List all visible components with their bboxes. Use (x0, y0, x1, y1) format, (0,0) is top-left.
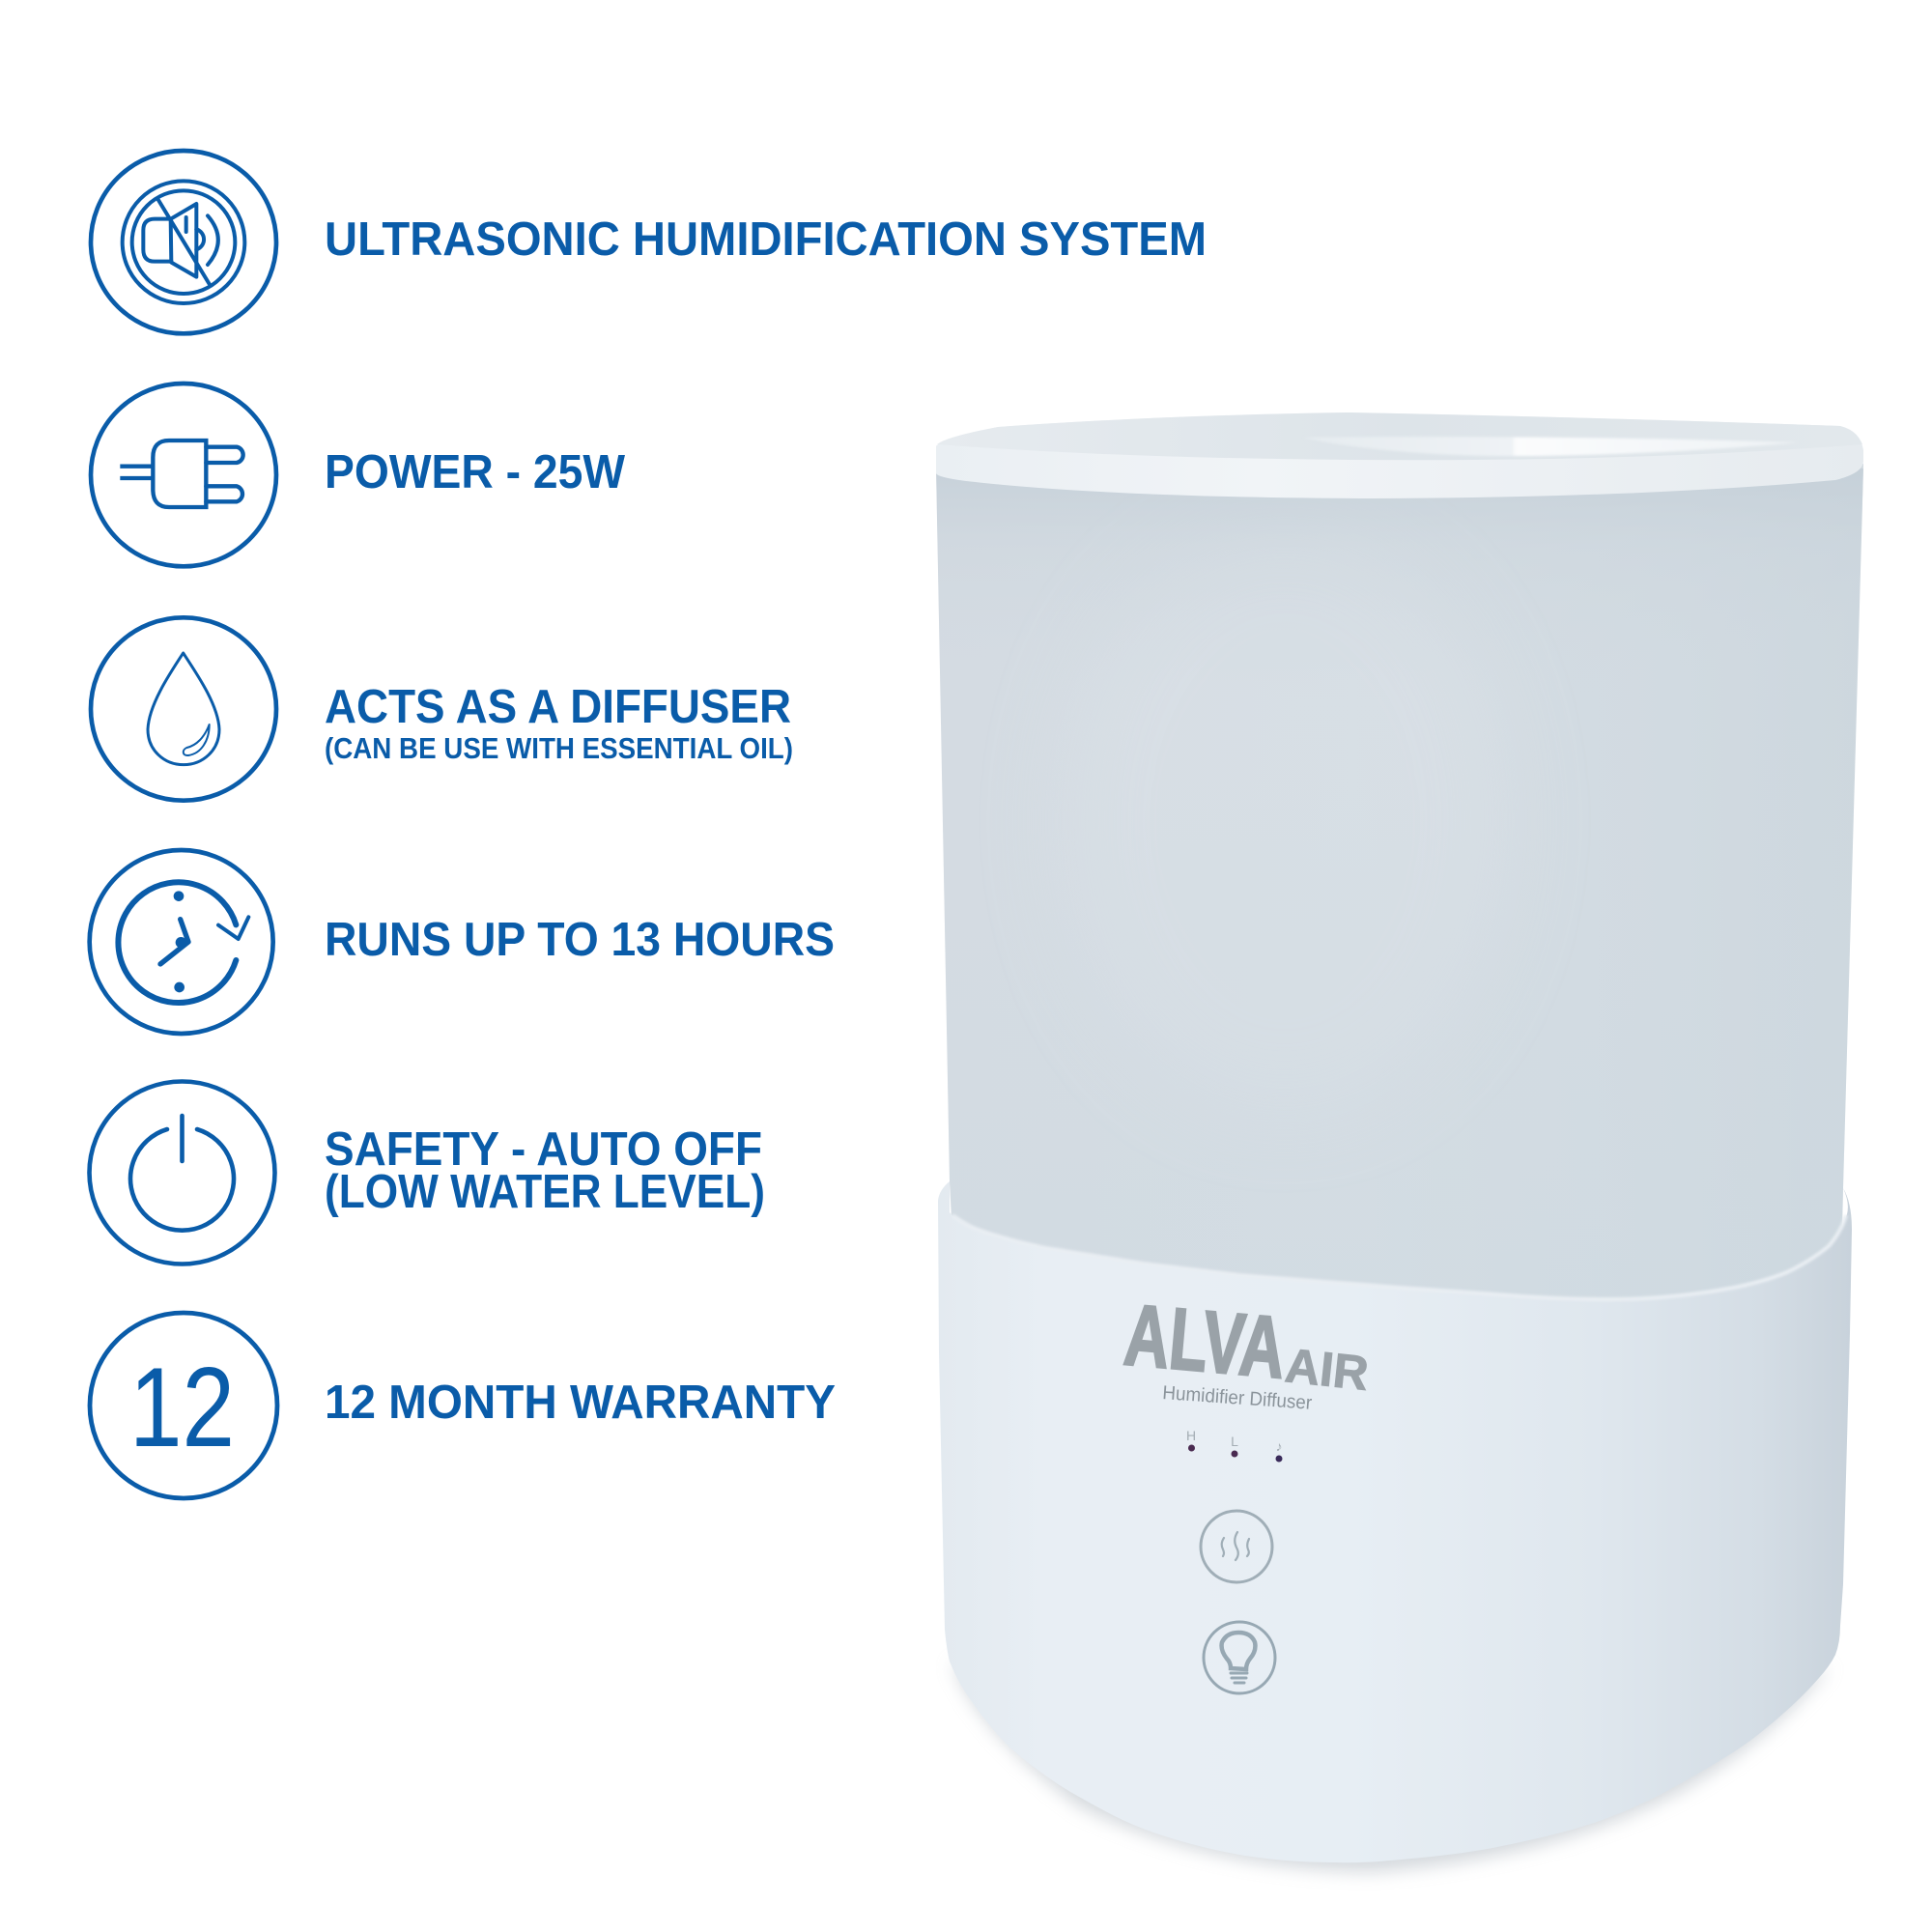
indicator lights: L (1231, 1434, 1238, 1449)
feature row: warranty (90, 1313, 836, 1498)
mist button (1201, 1511, 1272, 1582)
base sleeve (938, 1181, 1852, 1862)
icon: silent speaker (91, 151, 276, 333)
icon: plug (91, 384, 276, 566)
light button (1204, 1622, 1275, 1693)
feature row: power (91, 384, 626, 566)
lid (936, 412, 1863, 498)
feature row: safety (89, 1082, 765, 1264)
feature row: ultrasonic (91, 151, 1207, 333)
indicator lights: ♪ (1275, 1438, 1283, 1454)
text: runs up to 13 hours: RUNS UP TO 13 HOURS (325, 914, 835, 966)
text: acts as a diffuser: ACTS AS A DIFFUSER (325, 681, 791, 733)
text: low water level: (LOW WATER LEVEL) (325, 1166, 765, 1218)
text: 12 month warranty: 12 MONTH WARRANTY (325, 1377, 836, 1429)
icon: 12 badge (90, 1313, 277, 1498)
panel: humidifier product (936, 412, 1863, 1872)
product subtitle: Humidifier Diffuser (1162, 1382, 1313, 1414)
text: safety auto off: SAFETY - AUTO OFF (325, 1123, 762, 1176)
brand logo (1121, 1287, 1371, 1401)
text: power 25W: POWER - 25W (325, 446, 626, 498)
logo wordmark ALVA: ALVA (1121, 1287, 1289, 1397)
frosted water tank (936, 464, 1863, 1314)
feature row: diffuser (91, 617, 793, 801)
icon: 12 badge: 12 (129, 1344, 235, 1470)
ground shadow (952, 1662, 1831, 1872)
icon: clock (90, 850, 273, 1034)
feature row: run time (90, 850, 835, 1034)
indicator lights (1186, 1428, 1283, 1463)
icon: power button (89, 1082, 274, 1264)
text: essential oil note: (CAN BE USE WITH ESSENTIAL OIL) (325, 731, 793, 765)
panel: feature list (89, 151, 1207, 1498)
logo wordmark AIR: AIR (1283, 1338, 1371, 1401)
icon: oil drop (91, 617, 276, 801)
indicator lights: H (1186, 1428, 1196, 1443)
text: ultrasonic humidification system: ULTRASONIC HUMIDIFICATION SYSTEM (325, 213, 1207, 266)
